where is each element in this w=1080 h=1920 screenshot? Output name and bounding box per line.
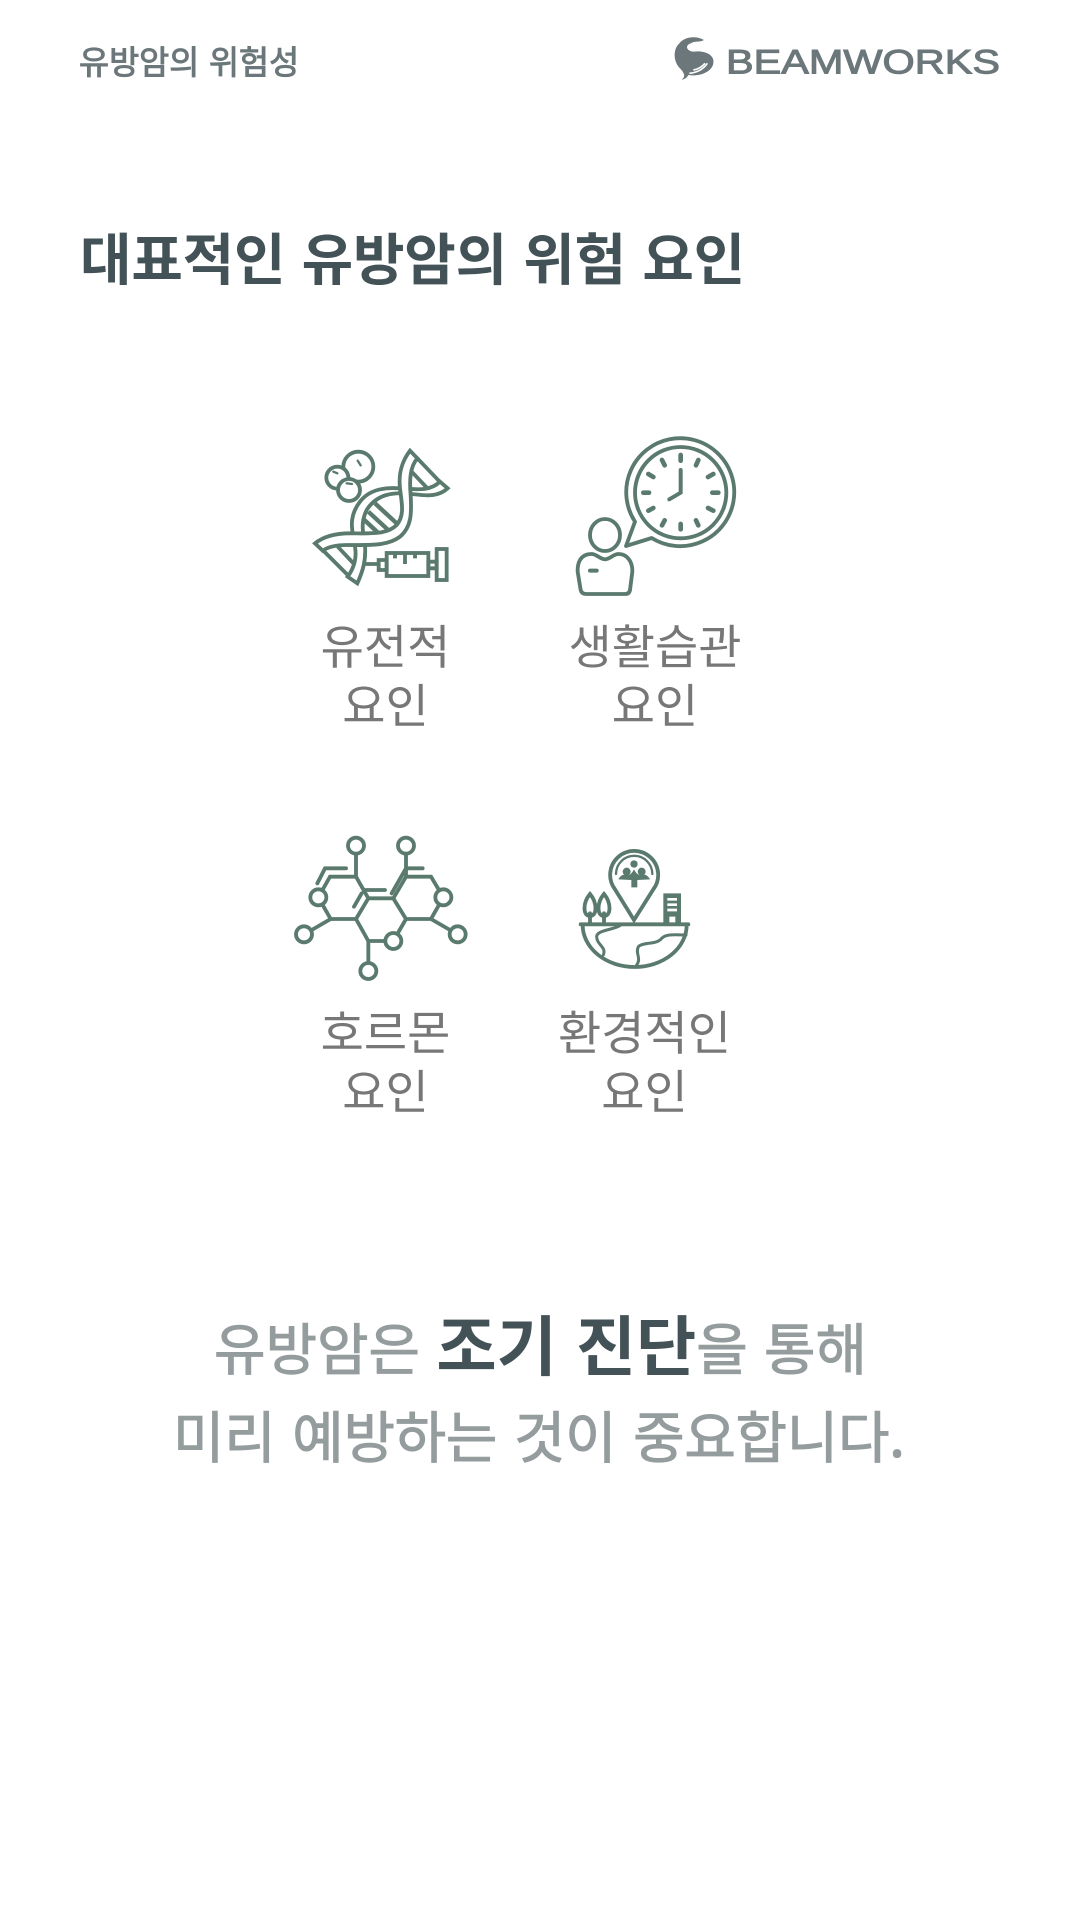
- label: genetic factors: 유전적: [321, 609, 450, 678]
- title: 대표적인 유방암의 위험 요인: [80, 216, 745, 297]
- label: hormonal factors: 요인: [342, 1054, 429, 1123]
- icon: person with clock speech bubble: [576, 436, 736, 596]
- logo: Beamworks: [674, 37, 1000, 81]
- logo whale mark: [675, 37, 714, 79]
- label: environmental factors: [558, 995, 731, 1123]
- label: hormonal factors: 호르몬: [321, 995, 450, 1064]
- label: lifestyle factors: [569, 609, 741, 737]
- label: lifestyle factors: 요인: [612, 668, 698, 737]
- icon: DNA and syringe: [312, 448, 450, 586]
- label: hormonal factors: [321, 995, 450, 1123]
- label: environmental factors: 요인: [601, 1054, 688, 1123]
- label: genetic factors: 요인: [342, 668, 429, 737]
- header label: 유방암의 위험성: [79, 37, 299, 84]
- icon: environment globe with location pin: [578, 849, 690, 969]
- logo wordmark: BEAMWORKS: [726, 43, 1000, 81]
- closing message line 1: 유방암은 조기 진단을 통해: [214, 1294, 867, 1389]
- label: environmental factors: 환경적인: [558, 995, 731, 1064]
- closing message line 2: 미리 예방하는 것이 중요합니다.: [173, 1394, 905, 1475]
- label: lifestyle factors: 생활습관: [569, 609, 741, 678]
- icon: hormone molecule: [294, 836, 468, 981]
- label: genetic factors: [321, 609, 450, 737]
